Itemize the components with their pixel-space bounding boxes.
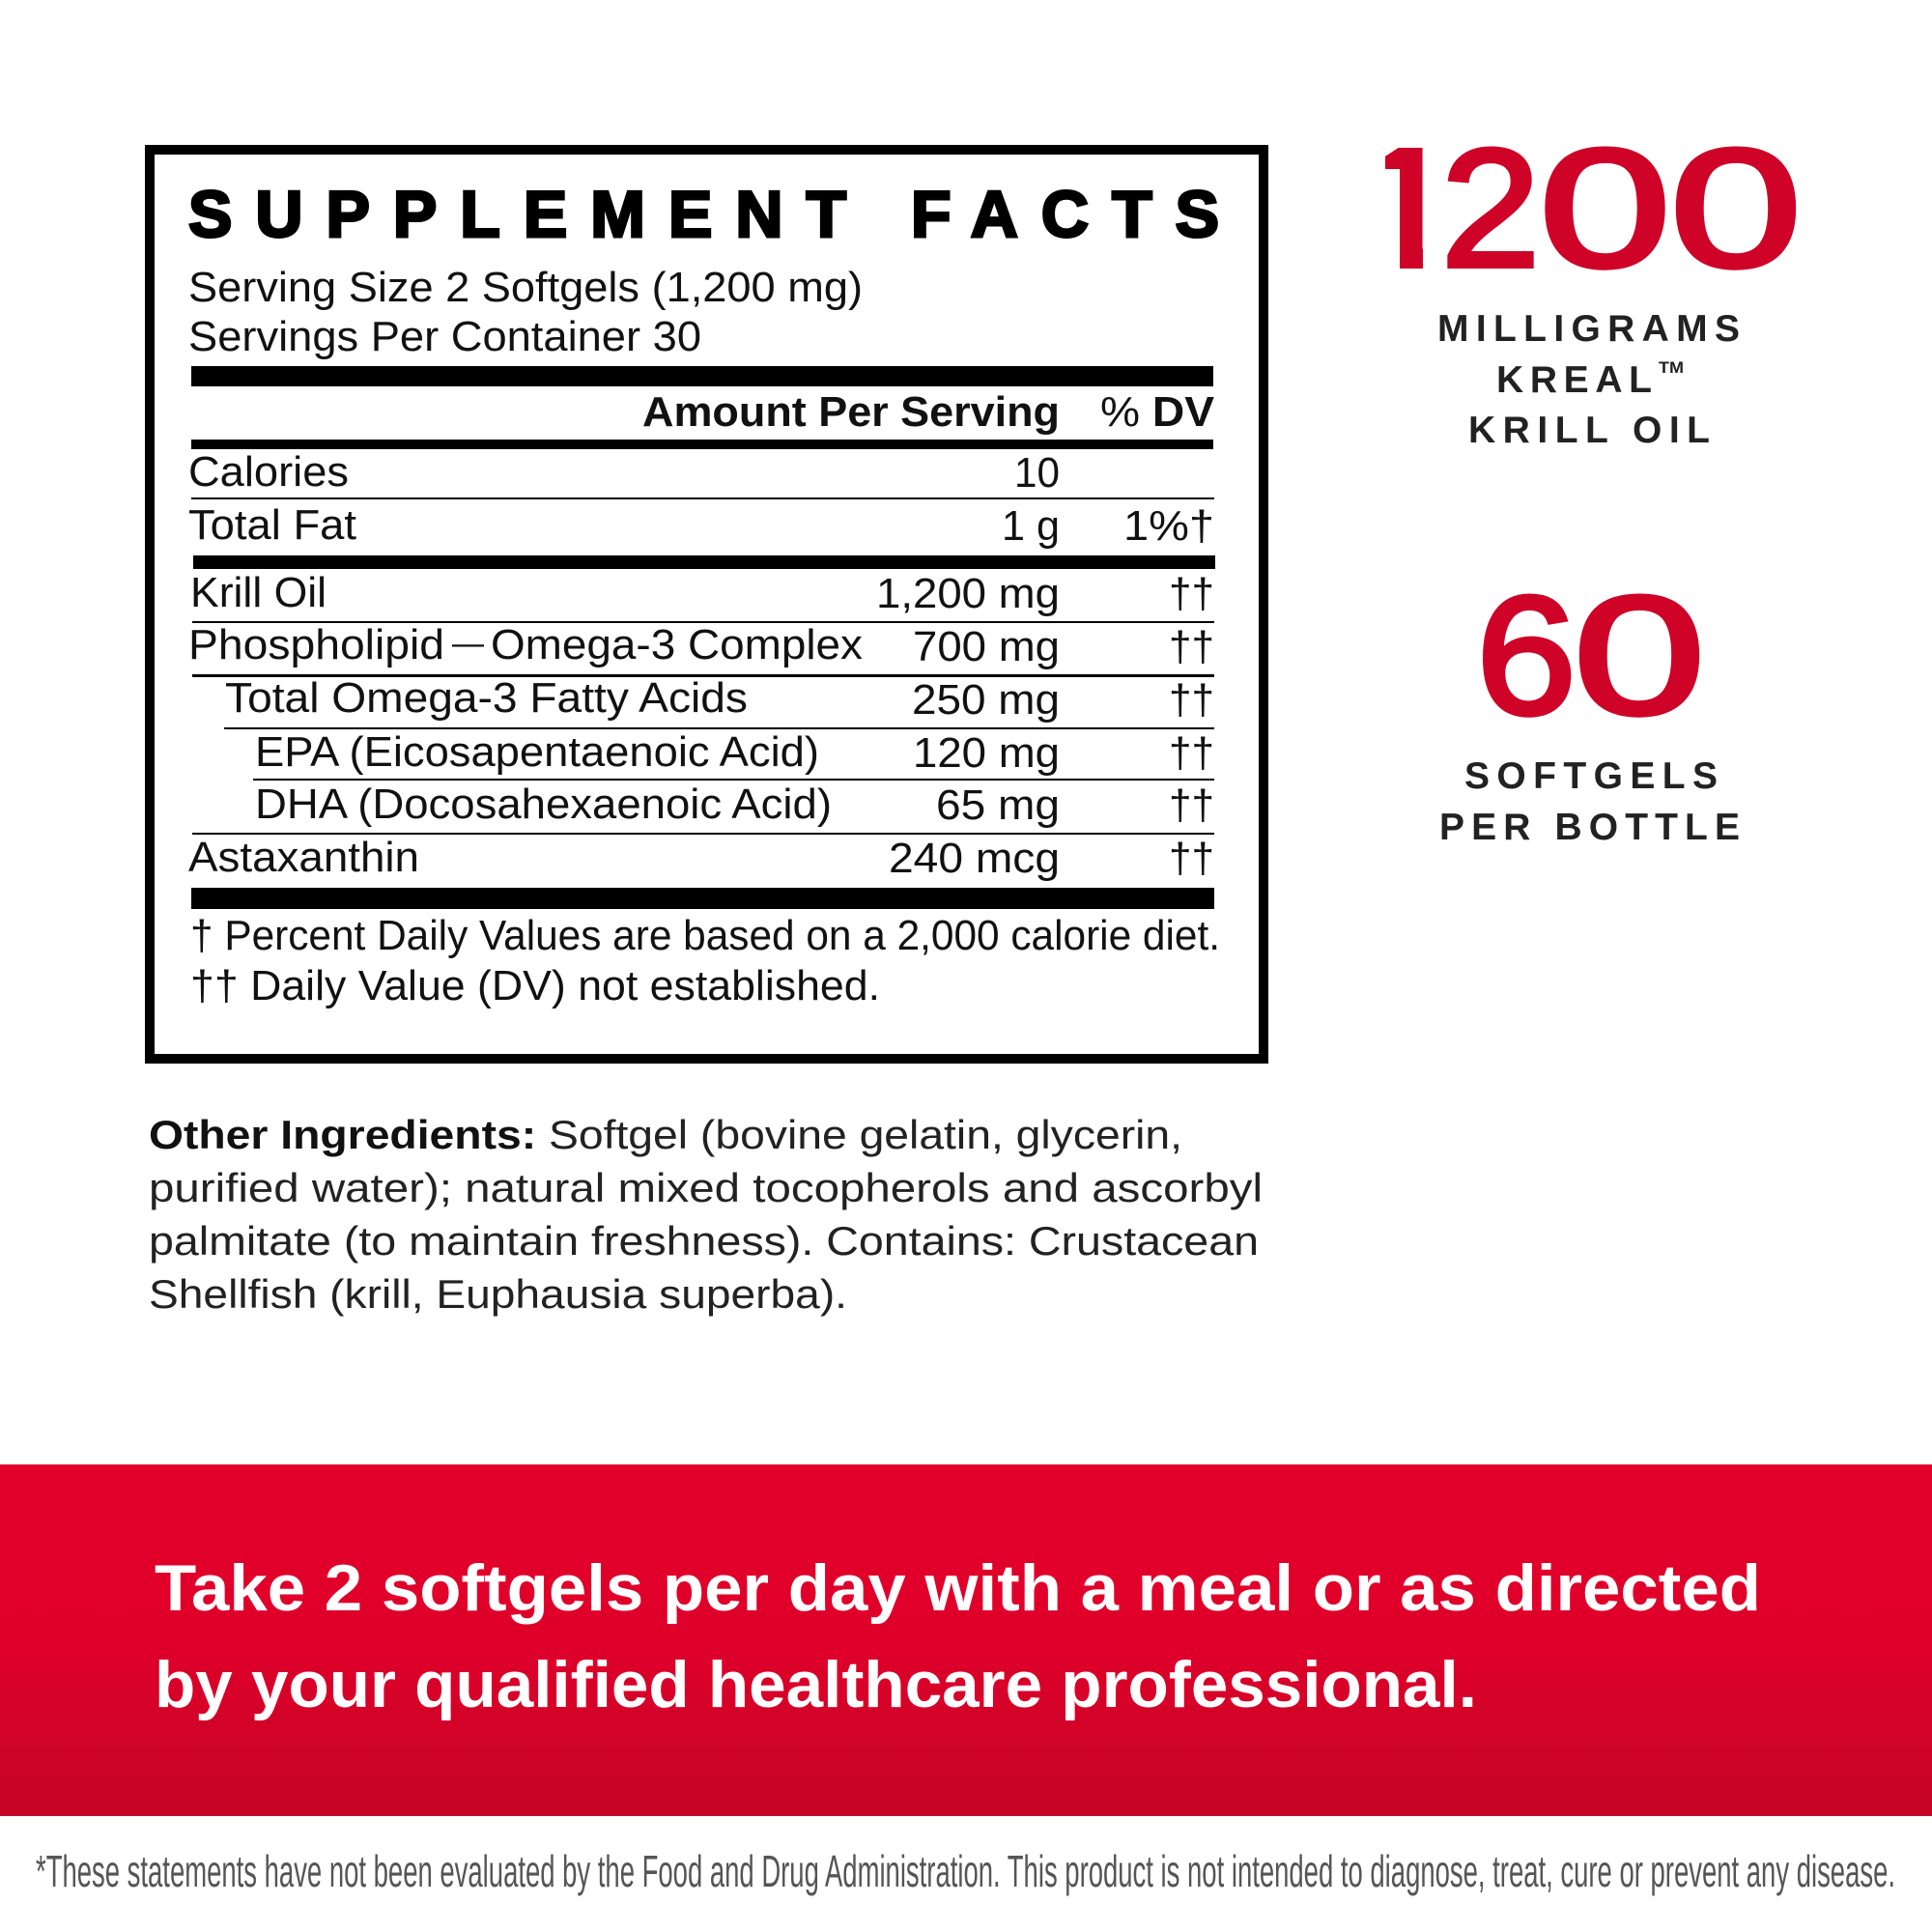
row: astaxanthin: ††: [1169, 835, 1214, 882]
row: calories: 10: [1014, 449, 1060, 497]
row: phospholipid: [188, 621, 1214, 670]
row: total omega-3: ††: [1169, 676, 1214, 724]
stat label: milligrams kreal krill oil: KRILL OIL: [1468, 410, 1710, 451]
row: total fat: 1 g: [1002, 502, 1060, 550]
row: astaxanthin: Astaxanthin: [188, 834, 419, 881]
stat label: softgels per bottle: [1439, 755, 1740, 848]
stat label: softgels per bottle: PER BOTTLE: [1439, 807, 1740, 848]
stat label: milligrams kreal krill oil: MILLIGRAMS: [1437, 308, 1740, 350]
footnotes: †† Daily Value (DV) not established.: [190, 962, 880, 1009]
row: total omega-3: [225, 674, 1214, 724]
heading: supplement facts: SUPPLEMENT FACTS: [188, 178, 1219, 251]
row: EPA: ††: [1169, 729, 1214, 777]
row: phospholipid: ††: [1169, 623, 1214, 670]
stat: 60: 0: [1574, 561, 1705, 750]
row: total fat: 1%†: [1123, 502, 1214, 550]
row: astaxanthin: 240 mcg: [889, 835, 1060, 882]
stat: 60: 6: [1476, 562, 1577, 750]
footnotes: † Percent Daily Values are based on a 2,000 calorie diet.: [190, 912, 1220, 959]
column headers: % DV: [1100, 388, 1215, 436]
row: DHA: 65 mg: [936, 781, 1060, 829]
stat label: milligrams kreal krill oil: [1437, 308, 1740, 451]
banner: directions: [0, 1464, 1932, 1816]
column headers: Amount Per Serving: [642, 388, 1060, 436]
banner text: [155, 1551, 1761, 1721]
row: EPA: 120 mg: [913, 729, 1060, 777]
row: calories: Calories: [188, 448, 349, 496]
row: total fat: [188, 501, 1214, 550]
stat label: milligrams kreal krill oil: TM: [1659, 358, 1684, 377]
text block: other ingredients: Shellfish (krill, Euphausia superba).: [149, 1271, 847, 1317]
stat: 1200: [1385, 147, 1797, 270]
text block: other ingredients: purified water); natural mixed tocopherols and ascorbyl: [149, 1165, 1263, 1210]
row: total fat: Total Fat: [188, 501, 356, 549]
row: phospholipid: Phospholipid: [188, 621, 444, 668]
row: phospholipid: Omega-3 Complex: [491, 621, 863, 668]
banner text: Take 2 softgels per day with a meal or as directed: [155, 1551, 1761, 1625]
text block: other ingredients: Other Ingredients: Softgel (bovine gelatin, glycerin,: [149, 1112, 1182, 1157]
row: astaxanthin: [188, 834, 1214, 882]
row: phospholipid: 700 mg: [913, 623, 1060, 670]
row: total omega-3: 250 mg: [912, 676, 1060, 724]
serving info: [188, 264, 863, 360]
stat: 1200: 0: [1539, 114, 1671, 302]
stat: 1200: 2: [1441, 114, 1540, 301]
stat: 1200: 1: [1357, 113, 1456, 302]
banner text: by your qualified healthcare professional.: [155, 1648, 1477, 1721]
row: krill oil: ††: [1169, 570, 1214, 617]
table rules: [191, 366, 1215, 909]
footnotes: [190, 912, 1220, 1009]
stat label: softgels per bottle: SOFTGELS: [1464, 755, 1718, 797]
row: total omega-3: Total Omega-3 Fatty Acids: [225, 674, 748, 722]
text block: other ingredients: [149, 1112, 1263, 1317]
row: DHA: ††: [1169, 781, 1214, 829]
row: phospholipid: —: [452, 625, 484, 661]
text block: other ingredients: palmitate (to maintain freshness). Contains: Crustacean: [149, 1218, 1259, 1264]
panel: supplement facts: [150, 150, 1264, 1059]
stat: 60: [1476, 561, 1705, 750]
serving info: Serving Size 2 Softgels (1,200 mg): [188, 264, 863, 311]
row: krill oil: Krill Oil: [190, 569, 327, 616]
stat label: milligrams kreal krill oil: KREAL: [1496, 359, 1652, 401]
row: EPA: [255, 728, 1214, 777]
row: EPA: EPA (Eicosapentaenoic Acid): [255, 728, 819, 776]
row: DHA: [255, 781, 1214, 829]
row: calories: [188, 448, 1060, 497]
row: krill oil: [190, 569, 1214, 617]
panel border: [150, 150, 1264, 1059]
stat: 1200: 0: [1670, 114, 1802, 302]
row: DHA: DHA (Docosahexaenoic Acid): [255, 781, 832, 828]
serving info: Servings Per Container 30: [188, 313, 701, 360]
row: krill oil: 1,200 mg: [876, 570, 1060, 617]
